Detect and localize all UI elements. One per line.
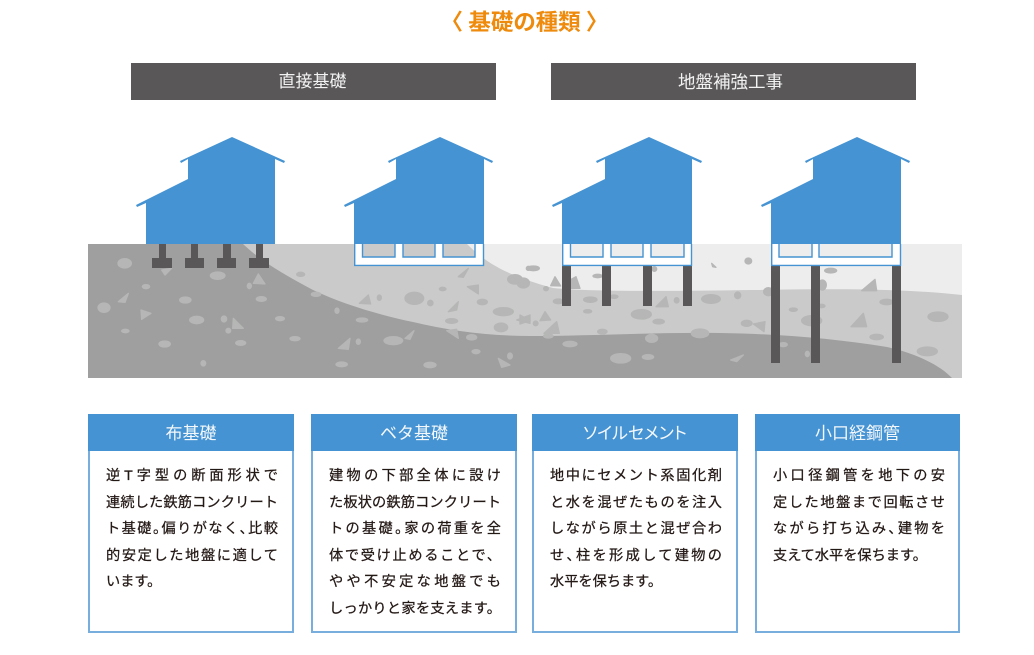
panel text: 建物の下部全体に設け xyxy=(329,468,501,484)
ground: soil layers xyxy=(88,244,962,378)
panel: strip foundation xyxy=(88,414,294,633)
panel text xyxy=(550,468,722,590)
panel text: います。 xyxy=(106,574,161,590)
heading: ground improvement xyxy=(551,63,916,100)
title: 〈 基礎の種類 〉 xyxy=(451,10,598,35)
panel text: 小口径鋼管を地下の安 xyxy=(773,468,945,484)
ground: stones left xyxy=(98,259,530,368)
house 4: small-diameter steel piles xyxy=(761,137,910,363)
panel text: しながら原土と混ぜ合わ xyxy=(550,521,722,537)
panel heading: ベタ基礎 xyxy=(380,424,448,443)
foundation diagram xyxy=(88,137,962,378)
house 2: mat foundation xyxy=(344,137,493,266)
panel heading: 小口経鋼管 xyxy=(815,424,900,443)
panel text: ト基礎。偏りがなく、比較 xyxy=(106,521,278,537)
panel heading: ソイルセメント xyxy=(583,424,687,443)
panel text: 的安定した地盤に適して xyxy=(106,548,278,564)
heading: direct foundation: 直接基礎 xyxy=(278,72,346,91)
panel heading xyxy=(755,414,960,451)
heading: ground improvement: 地盤補強工事 xyxy=(678,72,783,92)
panel text: 定した地盤まで回転させ xyxy=(773,495,945,511)
panel heading xyxy=(311,414,517,451)
panel text: 水平を保ちます。 xyxy=(550,574,662,590)
panel text: 支えて水平を保ちます。 xyxy=(773,548,927,564)
panel text xyxy=(773,468,945,564)
heading: direct foundation xyxy=(131,63,496,100)
house 1: strip foundation xyxy=(136,137,285,268)
ground: stones right xyxy=(517,258,948,363)
panel heading xyxy=(532,414,738,451)
panel heading xyxy=(88,414,294,451)
panel text xyxy=(329,468,501,617)
panel text: ながら打ち込み、建物を xyxy=(773,521,945,537)
panel text: 地中にセメント系固化剤 xyxy=(550,468,722,484)
panel text: た板状の鉄筋コンクリート xyxy=(329,495,501,511)
panel text: 体で受け止めることで、 xyxy=(329,548,501,564)
panel: small-diameter steel pipe xyxy=(755,414,960,633)
panel: mat foundation xyxy=(311,414,517,633)
panel text: と水を混ぜたものを注入 xyxy=(550,495,722,511)
panel: soil cement xyxy=(532,414,738,633)
panel heading: 布基礎 xyxy=(166,424,216,443)
panel text xyxy=(106,468,278,590)
panel text: 逆T字型の断面形状で xyxy=(106,468,278,484)
panel text: しっかりと家を支えます。 xyxy=(329,601,501,617)
panel text: 連続した鉄筋コンクリート xyxy=(106,495,278,511)
panel text: せ、柱を形成して建物の xyxy=(550,548,722,564)
house 3: soil cement columns xyxy=(552,137,702,306)
panel text: やや不安定な地盤でも xyxy=(329,574,501,590)
panel text: トの基礎。家の荷重を全 xyxy=(329,521,501,537)
